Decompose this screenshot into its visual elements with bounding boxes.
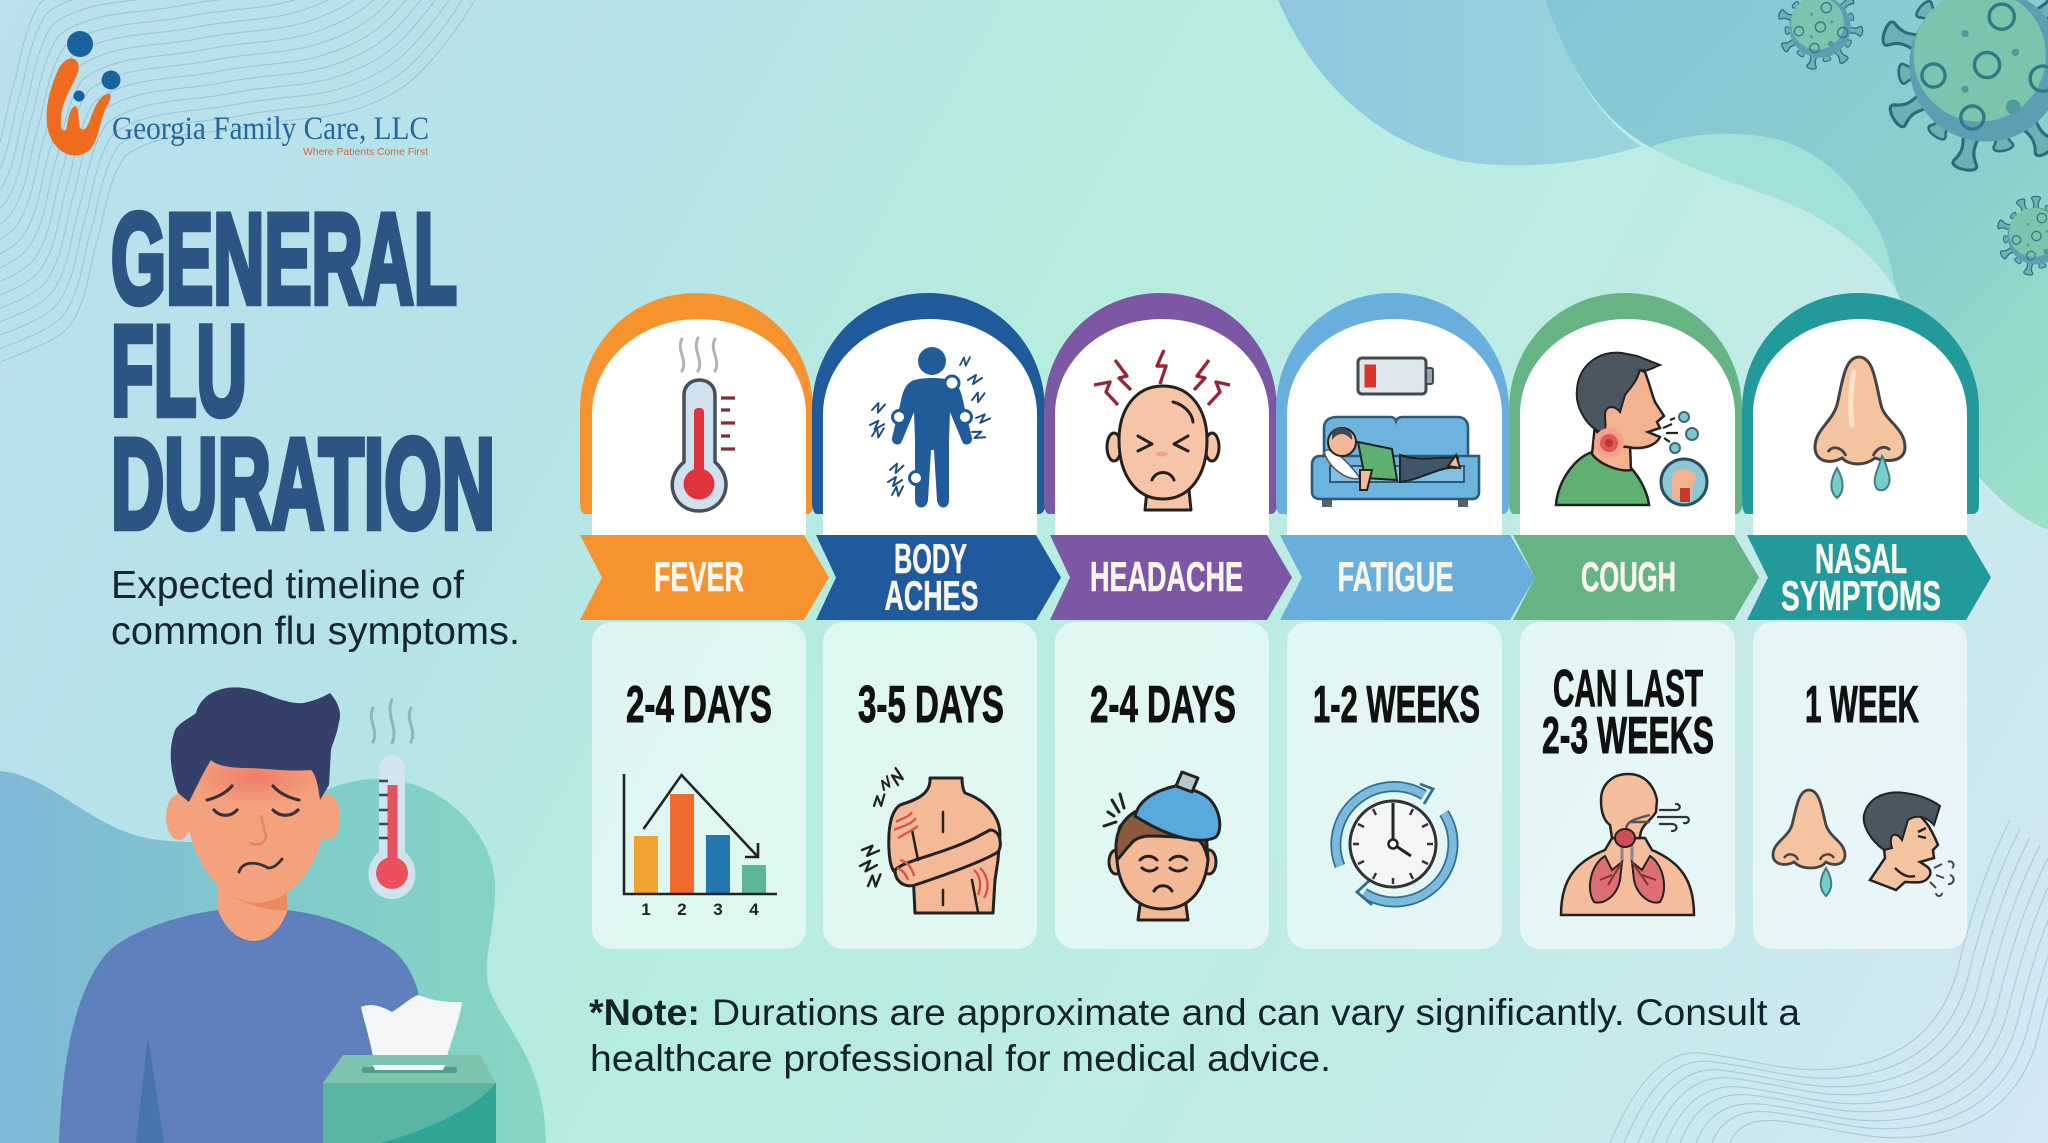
ribbon <box>1747 535 1991 620</box>
ribbon <box>816 535 1061 620</box>
icon: large virus <box>1881 0 2048 172</box>
logo mark <box>47 31 120 156</box>
panel: fever <box>580 293 829 949</box>
logo tagline: Where Patients Come First <box>303 146 428 158</box>
mouth <box>239 859 282 872</box>
duration: 2-3 WEEKS <box>1542 707 1714 765</box>
chart: bars with rise and fall arrow: 4 <box>749 900 759 919</box>
ribbon <box>1280 535 1535 620</box>
title: DURATION <box>111 413 495 556</box>
panel: nasal symptoms <box>1742 293 1991 949</box>
chart: bars with rise and fall arrow: 1 <box>641 900 651 919</box>
duration: 3-5 DAYS <box>858 676 1004 734</box>
icon: lungs and airway <box>1561 774 1694 915</box>
note: Durations are approximate and can vary significantly. Consult a <box>712 992 1800 1033</box>
label <box>884 535 978 619</box>
icon: head with ice pack <box>1104 772 1220 920</box>
duration: CAN LAST <box>1553 660 1703 718</box>
detail card <box>1753 622 1967 949</box>
icon: small virus right <box>1997 196 2048 276</box>
icon: thermometer <box>672 338 735 511</box>
duration: 1-2 WEEKS <box>1313 676 1480 734</box>
panel: cough <box>1509 293 1759 949</box>
label: FATIGUE <box>1338 553 1454 600</box>
decorative wave lines top-left <box>0 0 475 362</box>
shirt fold <box>136 1037 164 1143</box>
ribbon <box>1513 535 1759 620</box>
arch <box>1742 293 1979 514</box>
icon card <box>1753 319 1967 535</box>
ribbon <box>1050 535 1292 620</box>
label: FEVER <box>654 553 744 600</box>
tissue box <box>323 1055 496 1143</box>
ears <box>166 794 340 840</box>
arch <box>1509 293 1742 514</box>
arch <box>580 293 813 514</box>
bottom-left background blob <box>0 771 546 1143</box>
label: COUGH <box>1581 553 1676 600</box>
chart: bars with rise and fall arrow: 2 <box>677 900 687 919</box>
chart: bars with rise and fall arrow: 3 <box>713 900 723 919</box>
detail card <box>592 622 806 949</box>
icon: body with joint pain <box>870 347 991 508</box>
note: *Note: <box>589 992 700 1033</box>
detail card <box>1055 622 1269 949</box>
label: NASAL <box>1815 535 1907 582</box>
icon: sore shoulder and arm <box>860 768 1000 913</box>
note <box>589 992 1800 1079</box>
decorative wave lines bottom-right <box>1610 820 2048 1143</box>
title: GENERAL <box>111 188 457 331</box>
panel: fatigue <box>1276 293 1535 949</box>
subtitle: common flu symptoms. <box>111 610 520 653</box>
face <box>186 745 326 903</box>
illustration: sick man <box>59 687 496 1143</box>
detail card <box>1287 622 1502 949</box>
shirt <box>59 910 430 1143</box>
duration <box>1542 660 1714 765</box>
eyes and brows <box>207 786 299 815</box>
label <box>1781 535 1941 619</box>
icon: headache face <box>1094 350 1230 510</box>
panel: body aches <box>812 293 1061 949</box>
icon: low battery <box>1358 358 1433 394</box>
icon: man sneezing <box>1864 792 1954 896</box>
subtitle <box>111 564 520 653</box>
duration: 1 WEEK <box>1805 676 1919 734</box>
hair <box>171 687 340 802</box>
chart: bars with rise and fall arrow <box>624 774 777 919</box>
note: healthcare professional for medical advice. <box>590 1038 1331 1079</box>
label: HEADACHE <box>1090 553 1243 600</box>
arch <box>812 293 1045 514</box>
icon: small nose with drop <box>1773 790 1845 896</box>
icon: man coughing <box>1556 353 1707 505</box>
title <box>111 188 495 556</box>
panel: headache <box>1044 293 1292 949</box>
icon card <box>1520 319 1735 535</box>
arch <box>1044 293 1277 514</box>
tissue <box>361 995 462 1070</box>
icon: nose with drips <box>1815 357 1905 498</box>
ribbon <box>580 535 829 620</box>
icon card <box>823 319 1037 535</box>
duration: 2-4 DAYS <box>626 676 772 734</box>
title: FLU <box>111 300 247 443</box>
duration: 2-4 DAYS <box>1090 676 1236 734</box>
icon card <box>1287 319 1502 535</box>
nose <box>250 815 266 844</box>
icon card <box>1055 319 1269 535</box>
top-right background blobs <box>1278 0 2048 530</box>
icon: small virus top <box>1778 0 1863 70</box>
detail card <box>1520 622 1735 949</box>
icon: person asleep on sofa <box>1312 417 1479 507</box>
logo <box>47 31 429 158</box>
label: ACHES <box>884 572 978 619</box>
icon card <box>592 319 806 535</box>
label: BODY <box>894 535 967 582</box>
thermometer in air <box>369 700 415 899</box>
forehead flush <box>187 750 323 806</box>
logo name: Georgia Family Care, LLC <box>112 111 429 147</box>
arch <box>1276 293 1509 514</box>
subtitle: Expected timeline of <box>111 564 464 607</box>
neck <box>218 880 287 941</box>
detail card <box>823 622 1037 949</box>
label: SYMPTOMS <box>1781 572 1941 619</box>
icon: clock with cycle arrows <box>1336 784 1453 905</box>
